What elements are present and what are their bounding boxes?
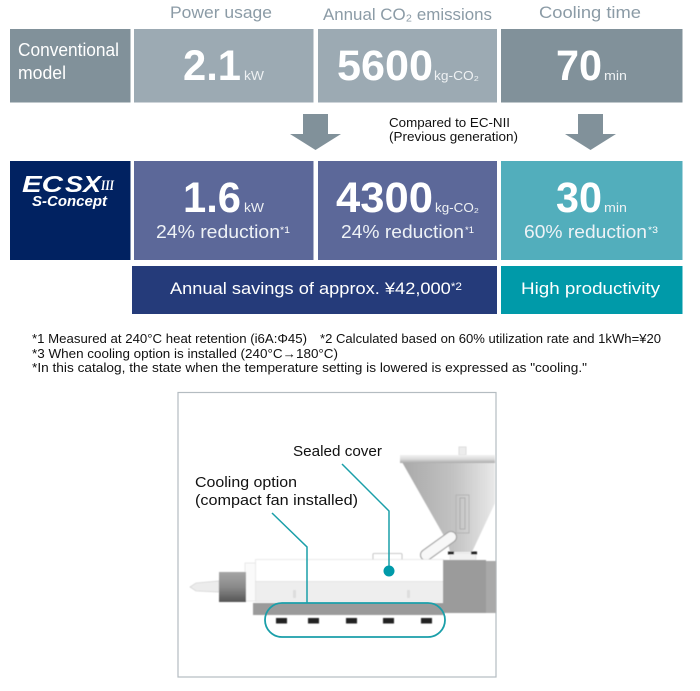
leader line: sealed cover <box>342 464 394 576</box>
footnotes: *3 When cooling option is installed (240°C→180°C) <box>32 347 338 361</box>
note: comparison basis <box>389 115 518 144</box>
banner: annual savings: *2 <box>451 281 462 293</box>
panel: new CO2 emissions: *1 <box>465 225 474 235</box>
leader line: cooling option <box>272 513 307 603</box>
diagram frame <box>178 392 496 677</box>
feed pipe <box>426 537 451 555</box>
nozzle <box>190 572 246 602</box>
panel: conventional CO2 emissions <box>318 29 497 102</box>
panel: new cooling time: min <box>604 200 627 215</box>
panel: conventional CO2 emissions: 5600 <box>337 42 433 90</box>
footnotes: *1 Measured at 240°C heat retention (i6A:Φ45) <box>32 332 307 346</box>
note: comparison basis: (Previous generation) <box>389 129 518 144</box>
panel: new power usage: kW <box>244 200 265 215</box>
row: EC-SX III S-Concept <box>10 161 682 260</box>
label: cooling option <box>195 474 358 509</box>
panel: conventional cooling time <box>501 29 682 102</box>
banner: annual savings <box>132 266 497 314</box>
panel: conventional power usage: kW <box>244 68 265 83</box>
illustration: injection unit <box>190 447 496 624</box>
logo panel: EC SX III S-Concept <box>10 161 130 260</box>
column heading: power usage: Power usage <box>170 3 272 22</box>
column heading: cooling time: Cooling time <box>539 3 641 22</box>
logo panel: EC SX III S-Concept: S-Concept <box>32 194 108 210</box>
panel: new cooling time: 60% reduction <box>524 222 647 242</box>
label: cooling option: Cooling option <box>195 474 297 491</box>
label: conventional model: Conventional <box>18 40 119 60</box>
compact fans <box>276 618 432 624</box>
panel: machine diagram <box>178 392 496 677</box>
panel: new power usage: 24% reduction <box>156 222 280 242</box>
footnotes: *2 Calculated based on 60% utilization rate and 1kWh=¥20 <box>320 332 661 346</box>
panel: conventional power usage <box>134 29 314 102</box>
logo panel: EC SX III S-Concept: III <box>100 178 115 194</box>
panel: new power usage: *1 <box>280 225 290 235</box>
panel: new CO2 emissions: 24% reduction <box>341 222 464 242</box>
footnotes: *In this catalog, the state when the temperature setting is lowered is expressed as "cooling." <box>32 361 587 375</box>
label: conventional model: model <box>18 63 66 83</box>
panel: new CO2 emissions: kg-CO₂ <box>435 200 479 215</box>
panel: conventional CO2 emissions: kg-CO₂ <box>434 68 479 83</box>
footnotes <box>32 332 661 375</box>
panel: new CO2 emissions: 4300 <box>336 174 433 222</box>
label: cooling option: (compact fan installed) <box>195 492 358 509</box>
highlight: cooling option area <box>265 603 445 637</box>
row: conventional model <box>10 29 682 102</box>
note: comparison basis: Compared to EC-NII <box>389 115 510 130</box>
panel: conventional cooling time: min <box>604 68 627 83</box>
panel: new power usage: 1.6 <box>183 174 241 222</box>
panel: new cooling time: *3 <box>648 225 658 235</box>
base and rear block <box>253 560 496 615</box>
label: sealed cover: Sealed cover <box>293 443 382 460</box>
panel: new power usage <box>134 161 314 260</box>
arrow: power and CO2 improvement <box>290 114 341 150</box>
panel: conventional power usage: 2.1 <box>183 42 241 90</box>
logo panel: EC SX III S-Concept: EC <box>22 171 63 197</box>
hopper <box>400 447 495 560</box>
label: conventional model <box>10 29 130 102</box>
logo panel: EC SX III S-Concept: SX <box>65 171 103 197</box>
banner: annual savings: Annual savings of approx. ¥42,000 <box>170 279 432 298</box>
column heading: annual CO2 emissions: Annual CO₂ emissions <box>323 5 492 24</box>
panel: new cooling time <box>501 161 682 260</box>
banner: high productivity: High productivity <box>521 279 661 298</box>
barrel cover <box>245 554 444 602</box>
panel: new cooling time: 30 <box>556 174 602 222</box>
panel: conventional cooling time: 70 <box>556 42 602 90</box>
banner: high productivity <box>501 266 682 314</box>
arrow: cooling time improvement <box>565 114 616 150</box>
panel: new CO2 emissions <box>318 161 497 260</box>
